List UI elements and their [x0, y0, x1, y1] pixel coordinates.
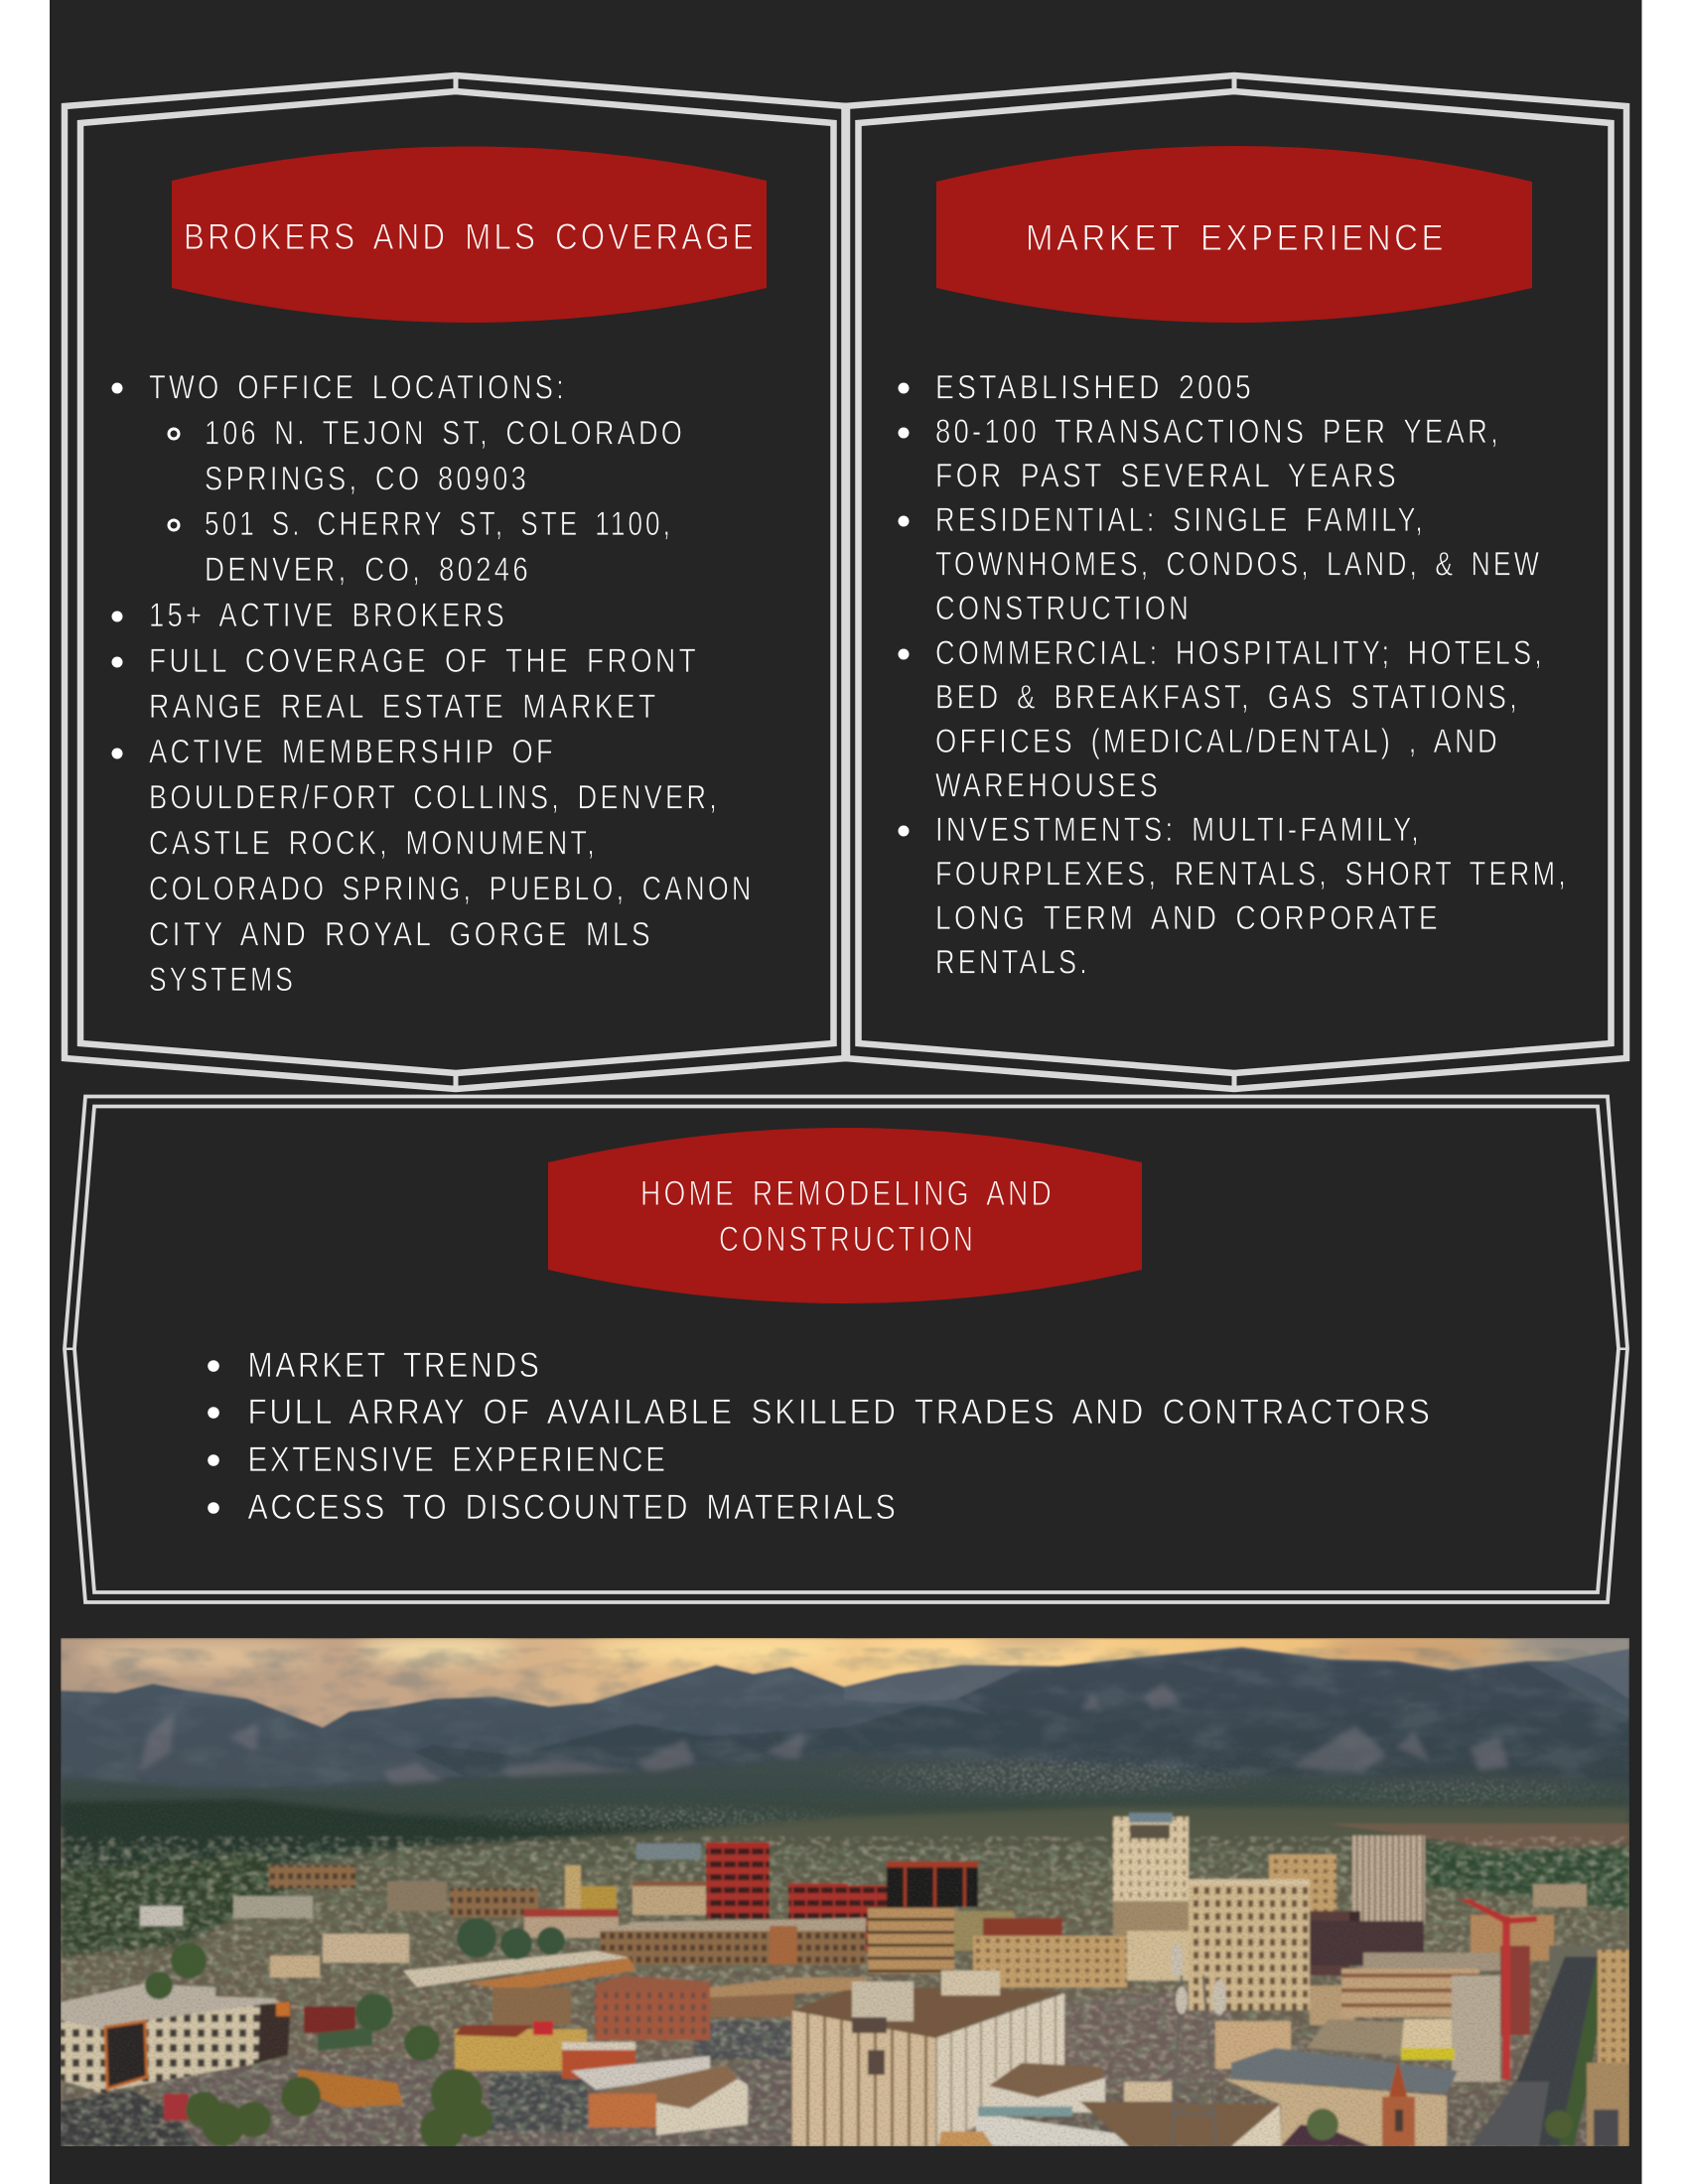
bullet list: offices, brokers and coverage: 15+ ACTIVE BROKERS — [149, 597, 507, 634]
front dark mountain, right — [957, 1650, 1629, 1787]
bullet list: offices, brokers and coverage: BOULDER/FORT COLLINS, DENVER, — [149, 779, 720, 817]
right panel double frame — [844, 75, 1626, 1089]
church and gray roof building — [1215, 2021, 1291, 2069]
heading banner: home remodeling and construction: HOME REMODELING AND — [640, 1174, 1055, 1213]
bullet list: offices, brokers and coverage: SYSTEMS — [149, 961, 296, 999]
bullet list: market experience: RENTALS. — [935, 944, 1090, 982]
bullet list: remodeling services: ACCESS TO DISCOUNTED MATERIALS — [248, 1488, 898, 1527]
right side buildings and road — [1471, 1915, 1554, 1961]
bullet list: market experience: LONG TERM AND CORPORATE — [935, 899, 1441, 937]
heading banner: home remodeling and construction: CONSTRUCTION — [719, 1220, 976, 1259]
foreground trees — [145, 1918, 565, 2151]
bullet list: market experience: TOWNHOMES, CONDOS, LAND, & NEW — [935, 546, 1542, 584]
bullet list: market experience: COMMERCIAL: HOSPITALITY; HOTELS, — [935, 634, 1545, 672]
red tower — [706, 1843, 770, 1919]
bullet list: offices, brokers and coverage: 106 N. TEJON ST, COLORADO — [205, 414, 685, 452]
bullet list: offices, brokers and coverage: ACTIVE MEMBERSHIP OF — [149, 734, 556, 771]
heading banner: market experience: MARKET EXPERIENCE — [1026, 216, 1447, 258]
rock faces — [139, 1683, 1509, 1790]
bullet list: market experience: INVESTMENTS: MULTI-FAMILY, — [935, 811, 1422, 849]
front hill, middle — [417, 1706, 1072, 1772]
bullet list: offices, brokers and coverage: RANGE REAL ESTATE MARKET — [149, 688, 659, 726]
bullet list: remodeling services: FULL ARRAY OF AVAILABLE SKILLED TRADES AND CONTRACTORS — [248, 1393, 1432, 1432]
dark glass building — [887, 1861, 978, 1907]
mid roofs and brick — [403, 1951, 630, 1987]
panel: market experience — [844, 75, 1626, 1089]
panel: home remodeling and construction — [65, 1096, 1628, 1602]
bullet list: offices, brokers and coverage: CITY AND ROYAL GORGE MLS — [149, 915, 653, 953]
heading banner: market experience — [936, 146, 1532, 323]
bullet list: offices, brokers and coverage: DENVER, CO, 80246 — [205, 551, 531, 589]
photo grain overlay — [61, 1747, 1629, 2146]
low roofs foreground — [993, 2079, 1105, 2113]
bullet list: market experience — [898, 369, 1569, 982]
heading banner: brokers and MLS coverage — [172, 147, 767, 323]
bullet list: market experience: FOR PAST SEVERAL YEARS — [935, 458, 1399, 495]
cell tower — [1172, 1976, 1216, 2146]
foreground left street and lots — [61, 2090, 199, 2146]
bullet list: market experience: 80-100 TRANSACTIONS PER YEAR, — [935, 413, 1501, 451]
town ground — [61, 1807, 1629, 2154]
heading banner: home remodeling and construction — [548, 1128, 1142, 1303]
long parking garage — [600, 1931, 866, 1965]
left panel double frame — [65, 75, 847, 1089]
bullet list: market experience: RESIDENTIAL: SINGLE FAMILY, — [935, 501, 1426, 539]
bullet list: remodeling services: MARKET TRENDS — [248, 1346, 542, 1385]
hotel — [61, 1983, 285, 2031]
bullet list: market experience: ESTABLISHED 2005 — [935, 369, 1254, 407]
panel: brokers and MLS coverage — [65, 75, 847, 1089]
bullet list: market experience: BED & BREAKFAST, GAS STATIONS, — [935, 678, 1520, 716]
bullet list: offices, brokers and coverage — [111, 369, 755, 999]
bullet list: market experience: CONSTRUCTION — [935, 590, 1192, 627]
heading banner: brokers and MLS coverage: BROKERS AND MLS COVERAGE — [184, 215, 757, 257]
bullet list: offices, brokers and coverage: COLORADO SPRING, PUEBLO, CANON — [149, 870, 755, 907]
back range — [61, 1647, 1629, 1827]
buildings, far row — [269, 1865, 355, 1888]
bullet list: offices, brokers and coverage: SPRINGS, CO 80903 — [205, 460, 529, 497]
bullet list: remodeling services: EXTENSIVE EXPERIENCE — [248, 1440, 667, 1479]
bullet list: market experience: WAREHOUSES — [935, 766, 1161, 804]
wide panel double frame — [65, 1096, 1628, 1602]
bullet list: offices, brokers and coverage: CASTLE ROCK, MONUMENT, — [149, 824, 598, 862]
bullet list: market experience: OFFICES (MEDICAL/DENTAL) , AND — [935, 723, 1500, 760]
photo: aerial view of downtown Colorado Springs and mountains — [61, 1634, 1648, 2154]
downtown towers — [1269, 1854, 1336, 1915]
bullet list: offices, brokers and coverage: 501 S. CHERRY ST, STE 1100, — [205, 505, 673, 543]
bullet list: offices, brokers and coverage: TWO OFFICE LOCATIONS: — [149, 369, 567, 407]
bullet list: offices, brokers and coverage: FULL COVERAGE OF THE FRONT — [149, 642, 699, 680]
big foreground stripe building — [791, 2010, 935, 2146]
bullet list: remodeling services — [208, 1346, 1433, 1527]
foothills — [61, 1755, 1629, 1901]
